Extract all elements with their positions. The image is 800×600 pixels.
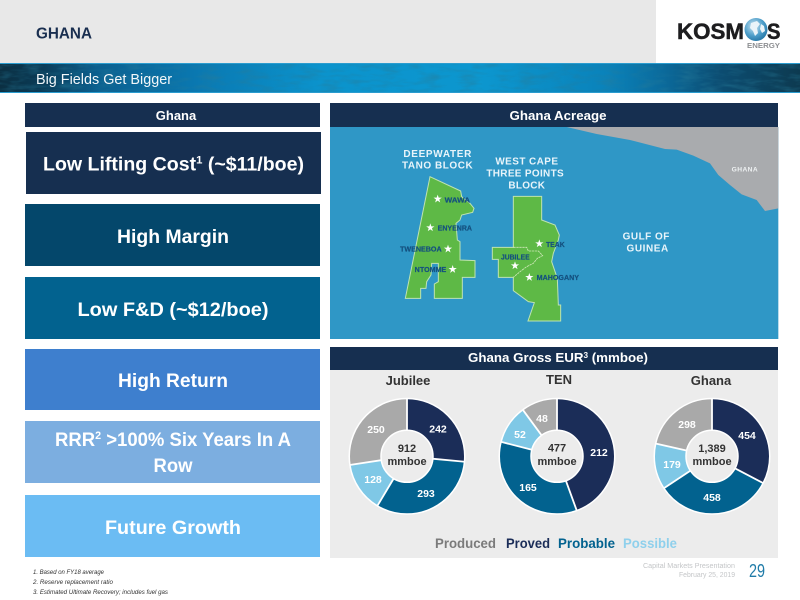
chart: Ghana donut: Ghana: [691, 373, 732, 388]
chart: TEN donut: 212: [590, 447, 608, 459]
land: Ghana coast: [567, 127, 778, 211]
left column heading: [25, 103, 320, 127]
block labels: GHANA: [732, 167, 758, 174]
logo: Kosmos Energy: S: [767, 19, 780, 44]
block labels: GULF OF: [623, 232, 669, 243]
field labels: JUBILEE: [501, 252, 530, 261]
chart: Jubilee donut: [348, 373, 466, 515]
field labels: MAHOGANY: [537, 273, 579, 282]
chart: TEN donut: 165: [519, 482, 537, 494]
logo: Kosmos Energy: KOSM: [677, 19, 744, 44]
chart: Ghana donut: 1,389: [698, 443, 726, 455]
deepwater tano block: [405, 177, 475, 298]
chart: Jubilee donut: Jubilee: [386, 373, 430, 388]
chart: TEN donut: 477: [548, 442, 566, 454]
right heading: acreage: [330, 103, 778, 127]
chart: Jubilee donut: mmboe: [387, 456, 427, 468]
chart: Ghana donut: mmboe: [692, 456, 732, 468]
panel: low lifting cost: Low Lifting Cost: [43, 154, 192, 176]
panel: future growth: Future Growth: [105, 518, 241, 539]
block labels: TANO BLOCK: [402, 161, 473, 172]
field labels: WAWA: [445, 196, 471, 205]
chart: Ghana donut: 458: [703, 492, 721, 504]
panel: RRR: Row: [154, 456, 193, 477]
panel: RRR: 2: [95, 430, 101, 442]
block labels: DEEPWATER: [403, 149, 471, 160]
block labels: [402, 149, 758, 255]
legend: Produced: [435, 535, 496, 551]
block labels: WEST CAPE: [495, 157, 558, 168]
panel: RRR: [25, 421, 320, 483]
heading: gross EUR: Ghana Gross EUR: [468, 350, 581, 365]
header bar: [0, 0, 656, 63]
map: Ghana acreage: [330, 127, 778, 339]
heading: gross EUR: [330, 347, 778, 370]
panel: high margin: [25, 204, 320, 266]
panel: high return: High Return: [118, 371, 228, 392]
footnotes: [32, 569, 169, 596]
block labels: THREE POINTS: [486, 169, 564, 180]
field labels: [400, 196, 579, 282]
chart: Ghana donut: 454: [738, 430, 756, 442]
panel: low lifting cost: (~$11/boe): [202, 154, 304, 176]
panel: low F&D: Low F&D (~$12/boe): [78, 300, 268, 321]
field labels: ENYENRA: [438, 224, 473, 233]
footer: presentation info: [643, 563, 735, 579]
panel: future growth: [25, 495, 320, 557]
chart: Ghana donut: 298: [678, 419, 696, 431]
heading: gross EUR: (mmboe): [588, 350, 648, 365]
page number: 29: [749, 561, 765, 581]
panel: high return: [25, 349, 320, 410]
chart: Ghana donut: [654, 373, 770, 515]
panel: low lifting cost: 1: [196, 154, 202, 166]
chart: TEN donut: 48: [536, 413, 548, 425]
panel: low lifting cost: [26, 132, 321, 194]
chart: Jubilee donut: 912: [398, 443, 416, 455]
chart: Ghana donut: 179: [663, 459, 681, 471]
footer: presentation info: Capital Markets Presentation: [643, 563, 735, 570]
chart: Jubilee donut: 128: [364, 474, 382, 486]
subtitle: Big Fields Get Bigger: [36, 71, 172, 88]
footnotes: 3. Estimated Ultimate Recovery; includes fuel gas: [33, 589, 169, 596]
legend: Probable: [558, 535, 615, 551]
field labels: NTOMME: [415, 265, 446, 274]
footnotes: 2. Reserve replacement ratio: [32, 579, 113, 586]
west cape three points block: [492, 196, 561, 321]
panel: low F&D: [25, 277, 320, 339]
footnotes: 1. Based on FY18 average: [33, 569, 104, 576]
logo: Kosmos Energy: [656, 0, 800, 63]
panel: RRR: RRR: [55, 430, 96, 451]
panel: EUR background: [330, 369, 778, 558]
chart: TEN donut: 52: [514, 429, 526, 441]
block labels: BLOCK: [508, 180, 546, 191]
logo: Kosmos Energy: O: [749, 19, 764, 44]
legend: [435, 535, 677, 551]
heading: gross EUR: 3: [583, 351, 589, 360]
field stars: [426, 195, 543, 281]
legend: Proved: [506, 535, 550, 551]
panel: high margin: High Margin: [117, 227, 229, 248]
field labels: TWENEBOA: [400, 245, 442, 254]
chart: TEN donut: mmboe: [537, 456, 577, 468]
chart: Jubilee donut: 293: [417, 488, 435, 500]
legend: Possible: [623, 535, 677, 551]
logo: Kosmos Energy: ENERGY: [747, 43, 780, 50]
banner: [0, 63, 800, 93]
title: GHANA: [36, 26, 92, 42]
chart: Jubilee donut: 250: [367, 424, 385, 436]
chart: Jubilee donut: 242: [429, 423, 447, 435]
panel: RRR: >100% Six Years In A: [101, 430, 291, 451]
footer: presentation info: February 25, 2019: [679, 572, 735, 579]
chart: TEN donut: TEN: [546, 372, 572, 387]
field labels: TEAK: [546, 240, 565, 249]
block labels: GUINEA: [626, 244, 668, 255]
right heading: acreage: Ghana Acreage: [510, 108, 606, 123]
left column heading: Ghana: [156, 108, 197, 123]
jubilee unit outline: [513, 247, 543, 277]
chart: TEN donut: [498, 372, 616, 515]
